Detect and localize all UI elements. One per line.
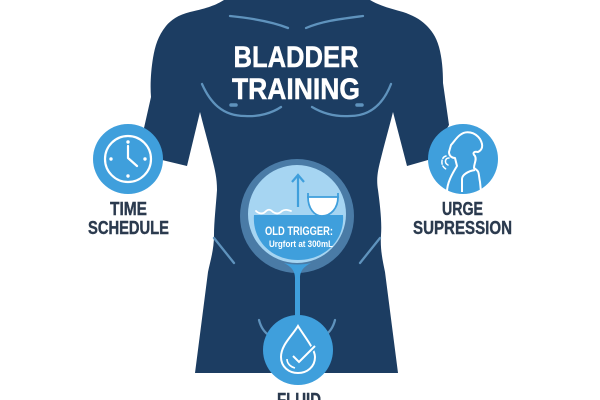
up arrow [292,175,304,207]
bladder diagram [240,159,354,273]
label: urge suppression: URGE [442,199,483,219]
title: BLADDER [234,41,359,74]
label: urge suppression [413,199,512,238]
icon: water drop with check [263,315,333,385]
label: time schedule [88,199,169,238]
label: time schedule: SCHEDULE [88,218,169,238]
icon: clock [93,124,163,194]
bowl [308,197,338,216]
label: time schedule: TIME [110,199,147,219]
icon: head and throat [428,124,498,194]
bladder diagram: Urgfort at 300mL [269,239,333,249]
label: urge suppression: SUPRESSION [413,218,512,238]
title [232,41,360,106]
torso silhouette [144,0,449,373]
title: TRAINING [232,73,360,106]
water fill [254,215,343,260]
wave line [256,210,291,213]
connector tube [284,263,311,320]
body contour lines [202,16,391,336]
bladder label: OLD TRIGGER: [265,226,333,238]
